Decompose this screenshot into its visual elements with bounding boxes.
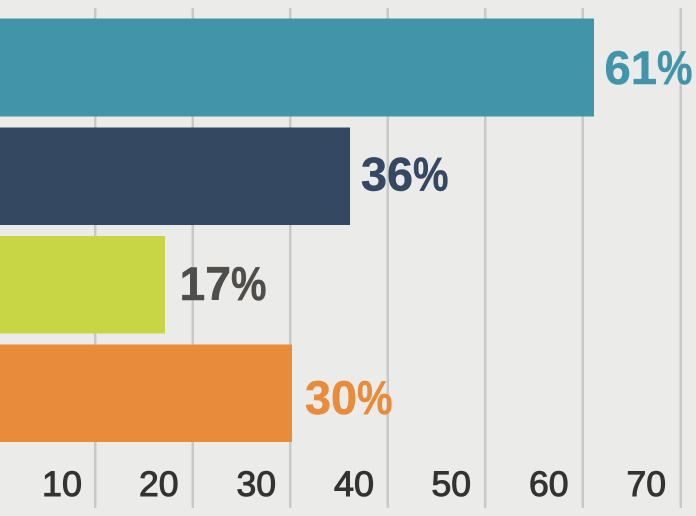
x-axis labels: 40 <box>334 465 374 504</box>
x-axis labels: 10 <box>42 465 82 504</box>
x-axis labels: 60 <box>529 465 568 504</box>
x-axis labels: 30 <box>236 465 276 504</box>
value label: 61%: 61% <box>604 41 692 94</box>
bar: 61% teal <box>0 18 594 116</box>
bar: 30% orange <box>0 344 292 442</box>
value label: 36%: 36% <box>361 148 448 200</box>
value label: 17%: 17% <box>180 257 266 310</box>
x-axis labels: 70 <box>626 465 666 504</box>
x-axis labels: 50 <box>432 465 471 504</box>
bar: 36% navy <box>0 128 350 225</box>
x-axis labels: 20 <box>139 465 178 504</box>
bar: 17% lime <box>0 236 165 334</box>
value label: 30%: 30% <box>305 371 392 424</box>
x-axis labels <box>42 465 666 504</box>
